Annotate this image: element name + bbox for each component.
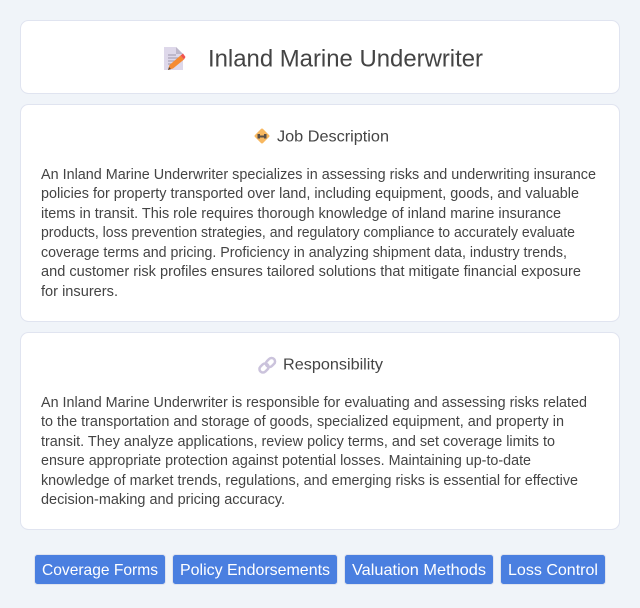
text block: job description	[41, 167, 596, 300]
text block: job description: coverage terms and pricing. Proficiency in analyzing shipment data, industry trends,	[41, 245, 567, 261]
tag: loss control: Loss Control	[508, 562, 598, 579]
text block: responsibility: decision-making and pricing accuracy.	[41, 492, 285, 508]
text block: responsibility	[41, 395, 587, 508]
panel: job description	[20, 104, 620, 322]
text block: job description: policies for property transported over land, including equipment, goods, and valuable	[41, 186, 579, 202]
tag: coverage forms: Coverage Forms	[42, 562, 158, 579]
panel: title header	[20, 20, 620, 94]
title: Inland Marine Underwriter	[208, 46, 483, 72]
tag: valuation methods: Valuation Methods	[352, 562, 486, 579]
heading: job description: Job Description	[277, 128, 389, 146]
icon: document with pencil	[164, 47, 186, 70]
text block: responsibility: transit. They analyze applications, review policy terms, and set coverage limits to	[41, 434, 555, 450]
panel: responsibility	[20, 332, 620, 530]
tag: policy endorsements	[172, 554, 338, 584]
heading: responsibility: Responsibility	[283, 356, 383, 374]
text block: responsibility: ensure appropriate protection against potential losses. Maintaining up-to-date	[41, 453, 531, 469]
icon: chain link	[258, 356, 277, 374]
text block: job description: An Inland Marine Underwriter specializes in assessing risks and underwriting insurance	[41, 167, 596, 183]
tag: loss control	[500, 554, 606, 584]
text block: job description: products, loss prevention strategies, and regulatory compliance to accurately evaluate	[41, 225, 575, 241]
text block: job description: and customer risk profiles ensures tailored solutions that mitigate financial exposure	[41, 264, 581, 280]
tag: valuation methods	[344, 554, 494, 584]
text block: responsibility: knowledge of market trends, regulations, and emerging risks is essential for effective	[41, 473, 578, 489]
text block: responsibility: An Inland Marine Underwriter is responsible for evaluating and assessing risks related	[41, 395, 587, 411]
tag: coverage forms	[34, 554, 166, 584]
text block: job description: for insurers.	[41, 284, 118, 300]
tag: policy endorsements: Policy Endorsements	[180, 562, 330, 579]
text block: job description: items in transit. This role requires thorough knowledge of inland marine insurance	[41, 206, 561, 222]
text block: responsibility: to the transportation and storage of goods, specialized equipment, and property in	[41, 414, 564, 430]
icon: road sign	[254, 128, 270, 144]
